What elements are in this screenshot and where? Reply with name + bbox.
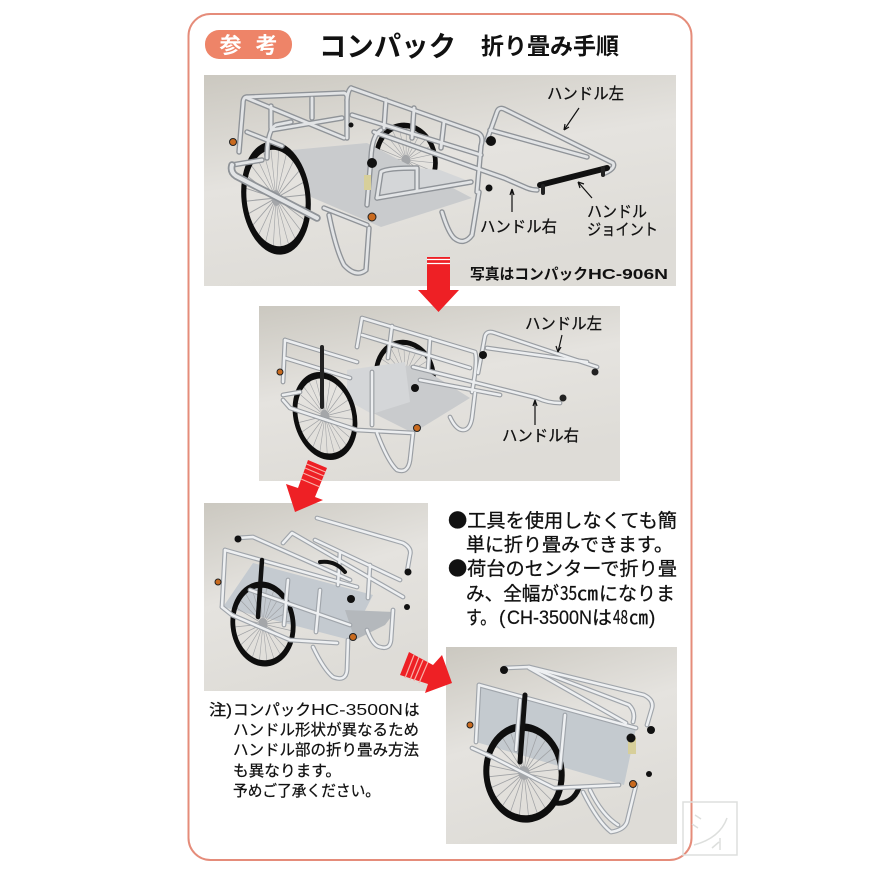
labels with leader arrows, photo 2: ハンドル右 bbox=[502, 427, 579, 445]
labels with leader arrows, photo 1: ハンドル bbox=[587, 204, 647, 221]
arrow 1: down bbox=[418, 257, 459, 312]
bullet text block bbox=[448, 506, 677, 630]
watermark bbox=[683, 802, 737, 855]
bullet text block: ㎝ bbox=[629, 603, 648, 630]
labels with leader arrows, photo 1: HC-906N bbox=[588, 266, 668, 283]
bullet text block: 48 bbox=[613, 603, 628, 630]
arrow 2: down-left bbox=[286, 460, 327, 512]
bullet text block: ●工具を使用しなくても簡 bbox=[448, 506, 677, 533]
note text: HC-3500N bbox=[311, 702, 403, 719]
cart illustration 4 bbox=[467, 666, 655, 832]
photo 4: fully folded bbox=[446, 647, 677, 844]
labels with leader arrows, photo 1 bbox=[470, 85, 668, 283]
cart illustration 1 bbox=[230, 88, 614, 273]
photo 2: handles detached bbox=[259, 306, 620, 481]
note text: ハンドル部の折り畳み方法 bbox=[233, 741, 419, 759]
bullet text block: ) bbox=[649, 608, 655, 629]
labels with leader arrows, photo 1: 写真はコンパック bbox=[470, 265, 588, 283]
labels with leader arrows, photo 1: ハンドル右 bbox=[480, 218, 557, 236]
labels with leader arrows, photo 2: ハンドル左 bbox=[525, 315, 602, 333]
photo 3: folding bbox=[204, 503, 428, 691]
title bbox=[319, 31, 619, 62]
labels with leader arrows, photo 1: ハンドル左 bbox=[547, 85, 624, 103]
note text: 注) bbox=[209, 701, 232, 719]
heading badge: 参考: 参考 bbox=[220, 33, 278, 58]
bullet text block: ●荷台のセンターで折り畳 bbox=[448, 554, 677, 581]
panel: rounded frame bbox=[188, 14, 692, 860]
note text bbox=[209, 701, 420, 800]
bullet text block: になりま bbox=[599, 579, 675, 606]
bullet text block: 35 bbox=[560, 579, 577, 606]
note text: は bbox=[404, 702, 420, 719]
title: コンパック bbox=[319, 31, 456, 62]
cart illustration 3 bbox=[215, 518, 412, 678]
photo 1: open cart bbox=[204, 75, 676, 286]
bullet text block: す。 bbox=[466, 603, 496, 630]
note text: 予めご了承ください。 bbox=[233, 782, 380, 800]
note text: も異なります。 bbox=[233, 762, 341, 780]
note text: コンパック bbox=[233, 701, 311, 719]
cart illustration 2 bbox=[277, 318, 598, 471]
heading badge: 参考 bbox=[205, 30, 292, 59]
bullet text block: 単に折り畳みできます。 bbox=[466, 530, 673, 557]
arrow 3: right-down bbox=[400, 652, 452, 693]
bullet text block: は bbox=[592, 603, 612, 630]
bullet text block: ㎝ bbox=[577, 579, 598, 606]
note text: ハンドル形状が異なるため bbox=[233, 721, 419, 739]
bullet text block: CH-3500N bbox=[507, 608, 592, 629]
bullet text block: ( bbox=[499, 608, 506, 629]
labels with leader arrows, photo 2 bbox=[502, 315, 602, 445]
title: 折り畳み手順 bbox=[481, 33, 619, 59]
bullet text block: み、全幅が bbox=[466, 579, 559, 606]
labels with leader arrows, photo 1: ジョイント bbox=[587, 222, 658, 239]
